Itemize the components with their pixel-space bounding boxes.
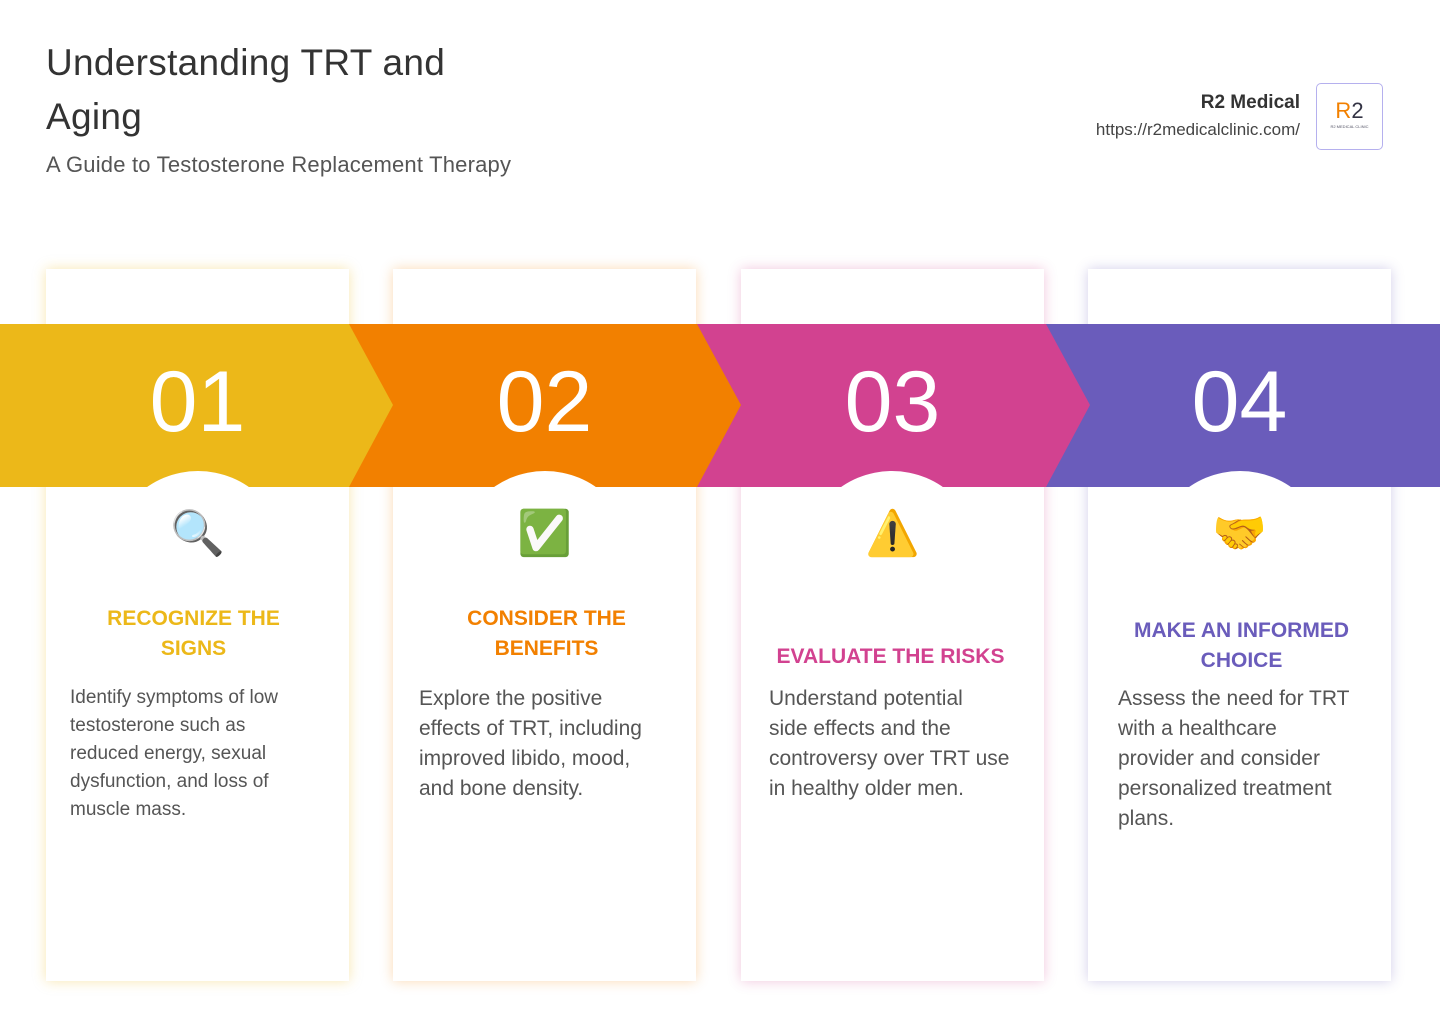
text 3: in healthy older men. [769,777,964,800]
text 4 [1118,687,1350,830]
brand text: R2 Medical [1201,92,1300,113]
text 2: improved libido, mood, [419,747,630,770]
text 3: controversy over TRT use [769,747,1009,770]
text: 04 [1192,354,1287,450]
heading 4: MAKE AN INFORMED [1134,619,1349,642]
icon: magnifier: 🔍 [170,507,225,559]
heading 1: SIGNS [161,637,226,660]
text 2: Explore the positive [419,687,602,710]
text 3: side effects and the [769,717,951,740]
title: Understanding TRT and [46,42,445,83]
text 1: dysfunction, and loss of [70,771,269,792]
brand text [1096,92,1300,139]
arrow band [0,324,1440,487]
text 4: plans. [1118,807,1174,830]
text 4: with a healthcare [1118,717,1277,740]
text 1: testosterone such as [70,715,245,736]
text 4: Assess the need for TRT [1118,687,1350,710]
text 1: Identify symptoms of low [70,687,278,708]
logo: R2 [1335,98,1364,123]
text: 02 [497,354,592,450]
title [46,42,445,137]
text 3: Understand potential [769,687,963,710]
subtitle: A Guide to Testosterone Replacement Therapy [46,152,511,177]
text 1: reduced energy, sexual [70,743,266,764]
brand text: https://r2medicalclinic.com/ [1096,120,1300,139]
heading 2: CONSIDER THE [467,607,626,630]
text 2: effects of TRT, including [419,717,642,740]
icon: handshake: 🤝 [1212,507,1267,559]
text 2: and bone density. [419,777,583,800]
heading 4 [1134,619,1349,672]
heading 2 [467,607,626,660]
heading 3: EVALUATE THE RISKS [777,645,1004,668]
text 1: muscle mass. [70,799,186,820]
heading 1: RECOGNIZE THE [107,607,280,630]
text 1 [70,687,278,820]
icon: check: ✅ [517,507,572,559]
title: Aging [46,96,142,137]
bumps [109,471,287,649]
logo: R2 MEDICAL CLINIC [1330,124,1369,129]
heading 1 [107,607,280,660]
text: 03 [845,354,940,450]
numbers: 01 [150,354,245,450]
text 4: personalized treatment [1118,777,1332,800]
logo [1316,83,1383,150]
heading 2: BENEFITS [495,637,598,660]
text 3 [769,687,1009,800]
cards [46,269,349,981]
text 4: provider and consider [1118,747,1320,770]
text 2 [419,687,642,800]
heading 4: CHOICE [1201,649,1282,672]
icon: warning: ⚠️ [865,507,920,559]
